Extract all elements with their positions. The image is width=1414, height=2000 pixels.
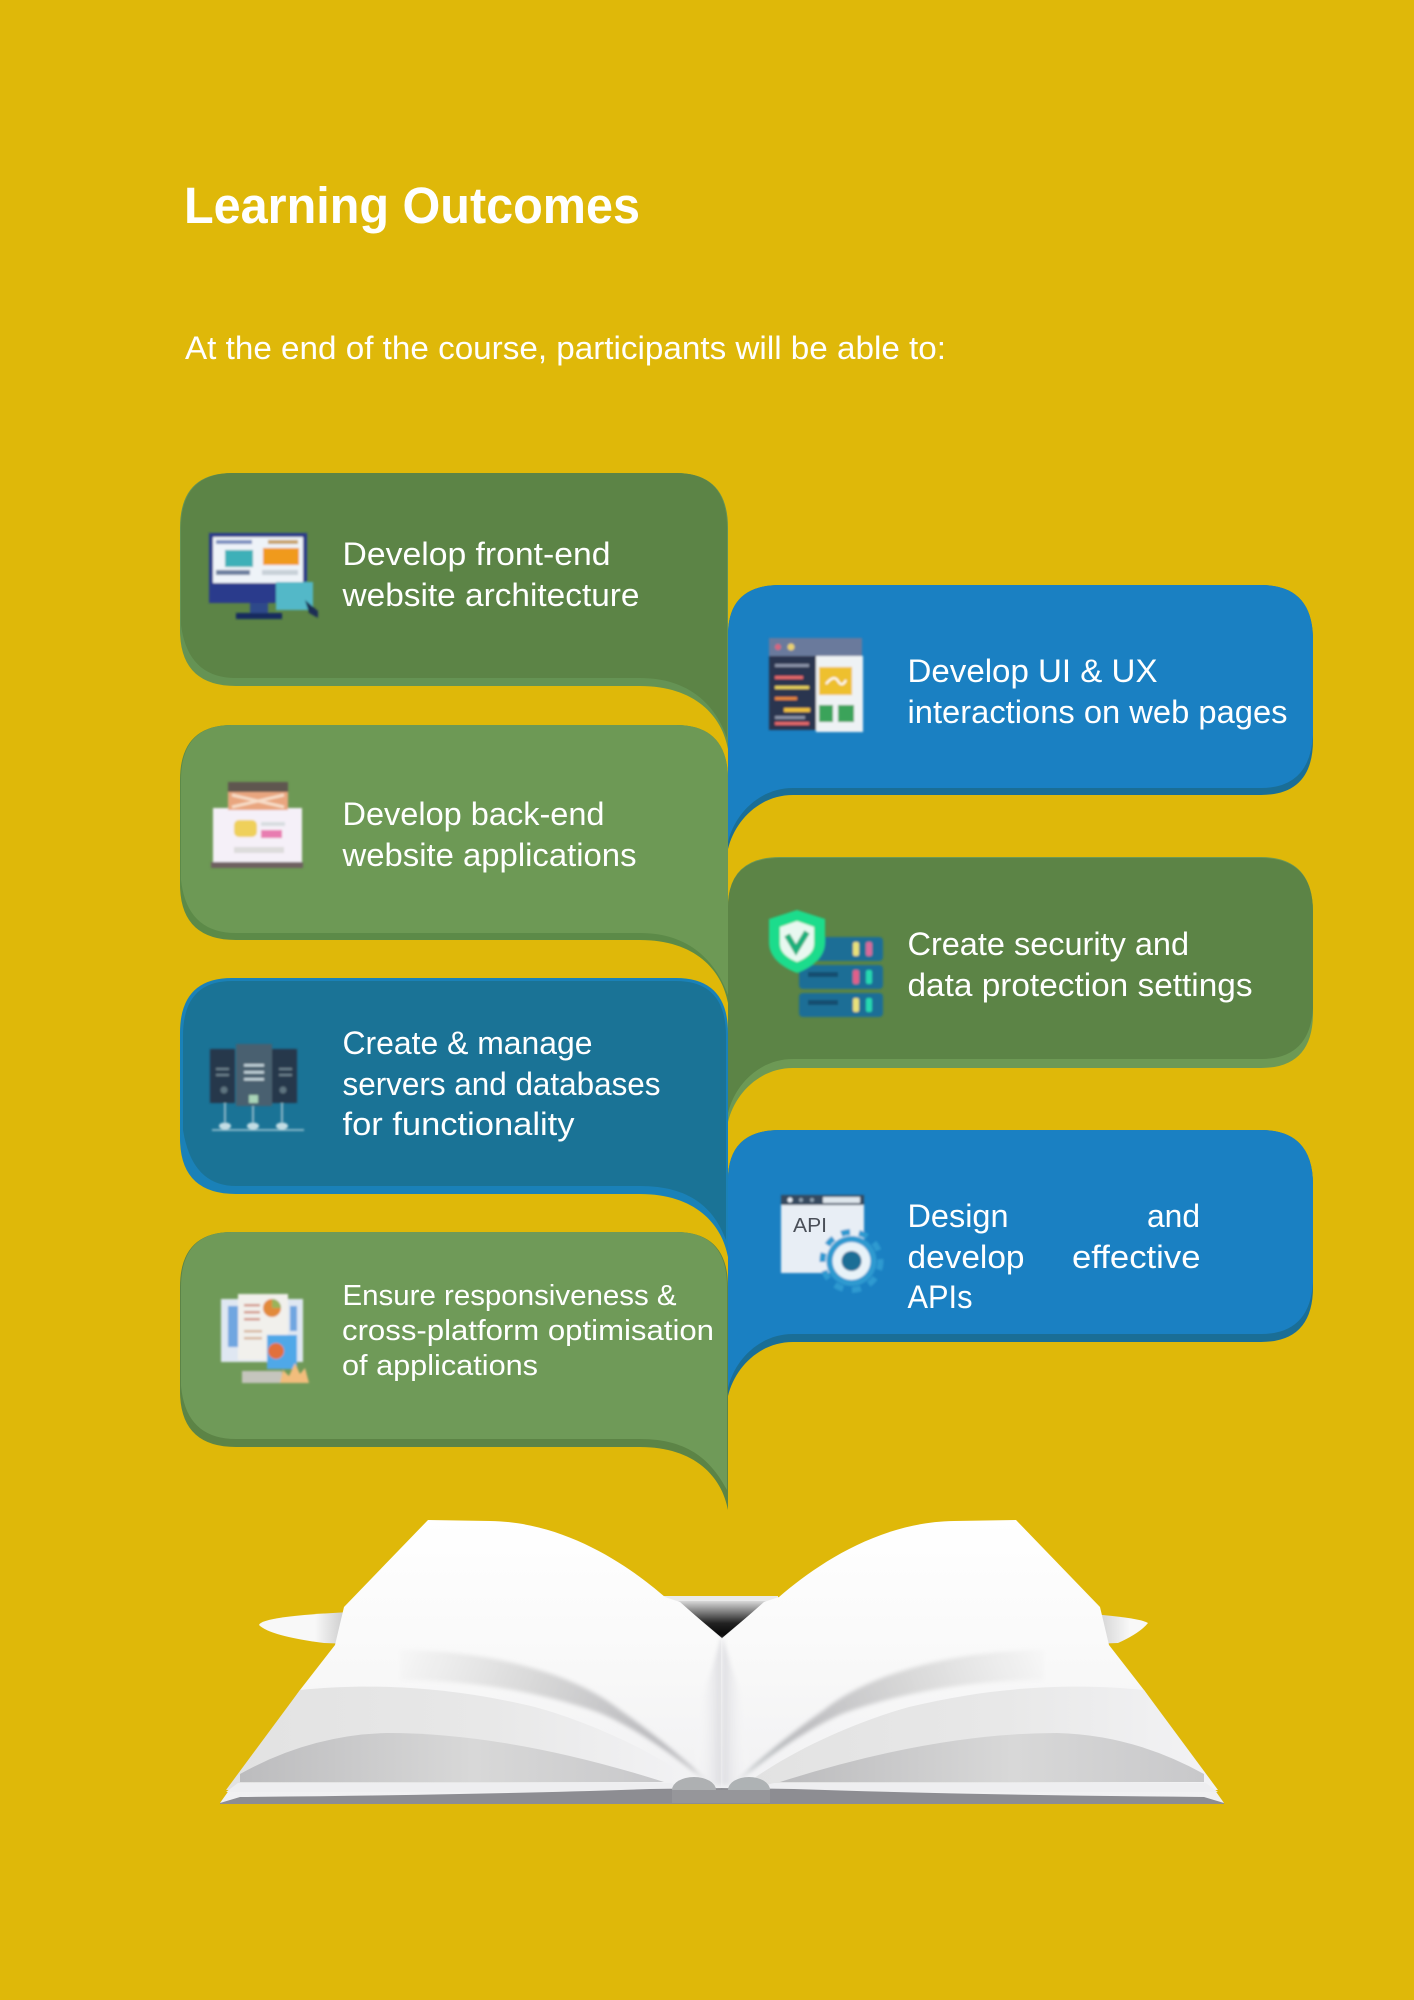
text: APIs: and [1147,1198,1200,1234]
icon: API gear: API [793,1215,827,1237]
icon: browser layout [211,782,303,868]
book: right page stack [721,1520,1224,1804]
icon: charts [221,1294,309,1383]
text: servers [342,1025,660,1142]
icon: API gear [781,1195,880,1290]
panel: APIs [728,1130,1313,1396]
text: responsiveness: of applications [342,1350,538,1382]
text: APIs [908,1198,1200,1315]
title: Learning Outcomes [184,177,640,234]
text: responsiveness: Ensure responsiveness & [342,1280,676,1312]
book: left page stack [220,1520,723,1804]
text: servers: servers and databases [342,1066,660,1102]
icon: servers [210,1044,304,1130]
book: back cover and gap [664,1596,778,1646]
book: spine [672,1777,770,1803]
book: left side tab [259,1612,352,1644]
text: security: data protection settings [908,967,1252,1003]
panel: UI and UX [728,585,1313,849]
text: front-end [341,536,640,613]
book: right side tab [1090,1614,1148,1644]
text: responsiveness: cross-platform optimisation [342,1315,714,1347]
panel: develop back-end [180,725,728,1003]
text: front-end: website architecture [341,577,640,613]
intro text: At the end of the course, participants will be able to: [185,330,946,366]
text: servers: for functionality [342,1106,574,1142]
icon: code page [769,638,863,732]
text: security: Create security and [908,926,1189,962]
text: UI and UX [908,653,1288,730]
text: APIs: effective [1072,1239,1200,1275]
text: APIs: Design [908,1198,1008,1234]
icon: monitor [209,533,318,619]
text: back-end: website applications [341,837,636,873]
text: UI and UX: interactions on web pages [908,694,1288,730]
panel: servers and databases [180,978,728,1257]
panel: develop front-end [180,473,728,749]
text: servers: Create & manage [342,1025,592,1061]
panel: security [728,857,1313,1122]
panel: responsiveness [180,1232,728,1510]
text: front-end: Develop front-end [342,536,610,572]
text: security [908,926,1252,1003]
text: back-end: Develop back-end [342,796,604,832]
text: APIs: develop [908,1239,1024,1275]
text: responsiveness [342,1280,714,1382]
text: APIs: APIs [908,1279,972,1315]
text: UI and UX: Develop UI & UX [908,653,1158,689]
open book illustration [220,1520,1224,1804]
text: back-end [341,796,636,873]
icon: shield and servers [769,910,883,1017]
